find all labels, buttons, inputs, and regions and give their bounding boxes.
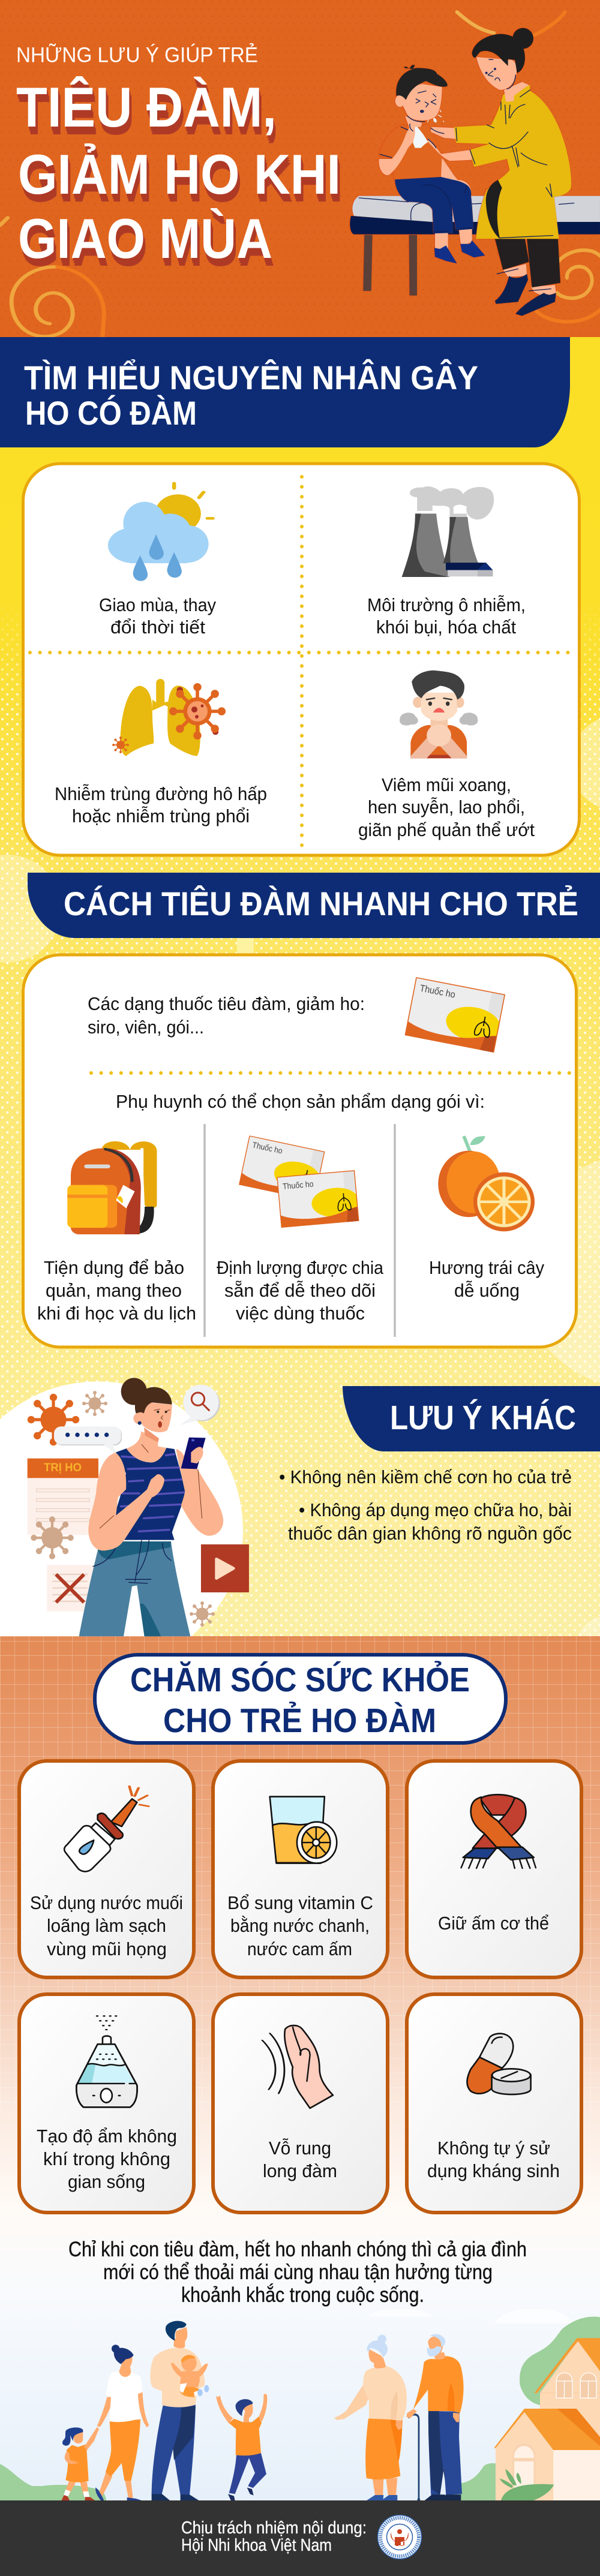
document: cough remedy: TRỊ HO [44, 1462, 82, 1474]
care card: chest percussion [213, 1994, 388, 2213]
benefit: pre-measured doses: việc dùng thuốc [236, 1303, 365, 1324]
note bullets: thuốc dân gian không rõ nguồn gốc [288, 1523, 572, 1544]
heading band: other notes [343, 1386, 600, 1451]
title: TIÊU ĐÀM, [16, 76, 277, 139]
care card: humidifier [19, 1994, 194, 2213]
panel: other notes [0, 1378, 600, 1636]
benefit: fruit flavour [429, 1136, 544, 1301]
heading band: causes [0, 337, 570, 447]
benefit: fruit flavour: Hương trái cây [429, 1257, 544, 1278]
care card: humidifier: gian sống [68, 2171, 145, 2192]
house [450, 2338, 600, 2500]
benefit: pre-measured doses: Thuốc ho [251, 1140, 283, 1156]
cause: chronic lung conditions: giãn phế quản thể ướt [358, 819, 535, 840]
care card: vitamin C [213, 1761, 388, 1977]
care card: no self-medicating antibiotics [407, 1994, 581, 2213]
rejected remedy document [47, 1565, 94, 1612]
closing message [68, 2238, 527, 2307]
illustration: family and house [0, 2309, 600, 2501]
closing message: mới có thể thoải mái cùng nhau tận hưởng từng [103, 2261, 493, 2284]
icon: medicine sachet: Thuốc ho [419, 984, 456, 1000]
heading band: causes: HO CÓ ĐÀM [25, 394, 197, 432]
mother [95, 2344, 149, 2500]
benefit: pre-measured doses: sẵn để dễ theo dõi [224, 1280, 376, 1301]
heading band: other notes: LƯU Ý KHÁC [390, 1398, 576, 1437]
family: grandparents and house [334, 2309, 600, 2500]
care card: saline spray [19, 1761, 194, 1977]
medicine forms text: Các dạng thuốc tiêu đàm, giảm ho: [88, 993, 365, 1014]
child [440, 156, 471, 194]
footer [0, 2500, 600, 2576]
cause: pollution: Môi trường ô nhiễm, [367, 594, 526, 615]
cause: pollution [367, 486, 526, 638]
care card: humidifier: khí trong không [43, 2148, 170, 2169]
cause: respiratory infection: hoặc nhiễm trùng phổi [72, 805, 250, 826]
care card: saline spray: Sử dụng nước muối [30, 1892, 183, 1913]
title [16, 76, 341, 270]
care card: no self-medicating antibiotics: Không tự ý sử [437, 2138, 550, 2159]
note bullets [279, 1466, 572, 1544]
care card: saline spray: vùng mũi họng [47, 1938, 167, 1959]
speech bubble: search [180, 1385, 220, 1425]
heading pill: child care: CHĂM SÓC SỨC KHỎE [130, 1660, 470, 1699]
cause: chronic lung conditions: Viêm mũi xoang, [382, 774, 511, 795]
care card: humidifier: Tạo độ ẩm không [37, 2126, 177, 2147]
grandmother [334, 2335, 407, 2500]
speech bubble: dots [54, 1426, 122, 1454]
medicine forms text [88, 993, 365, 1038]
care card: saline spray: loãng làm sạch [47, 1915, 166, 1936]
cause: weather change [99, 483, 216, 638]
benefit: portable: quản, mang theo [46, 1280, 182, 1301]
care card: no self-medicating antibiotics: dụng kháng sinh [427, 2160, 560, 2181]
care card: keep warm [407, 1761, 581, 1977]
note bullets: • Không nên kiềm chế cơn ho của trẻ [279, 1466, 572, 1487]
care card: chest percussion: Vỗ rung [269, 2138, 331, 2159]
boy [216, 2394, 267, 2500]
note bullets: • Không áp dụng mẹo chữa ho, bài [299, 1499, 572, 1520]
care card: vitamin C: bằng nước chanh, [230, 1915, 370, 1936]
care card: chest percussion: long đàm [263, 2160, 337, 2181]
document: cough remedy [28, 1459, 98, 1535]
benefit: pre-measured doses: Định lượng được chia [217, 1257, 384, 1278]
subtitle: NHỮNG LƯU Ý GIÚP TRẺ [16, 43, 258, 67]
care card: keep warm: Giữ ấm cơ thể [438, 1913, 549, 1934]
panel: causes card [23, 464, 580, 855]
father and baby [150, 2321, 209, 2500]
benefit: portable [37, 1141, 196, 1324]
footer: Chịu trách nhiệm nội dung: [181, 2518, 367, 2538]
heading band: causes: TÌM HIỂU NGUYÊN NHÂN GÂY [24, 359, 478, 396]
title: GIAO MÙA [18, 207, 272, 270]
cause: respiratory infection [55, 679, 267, 826]
title: GIẢM HO KHI [18, 143, 341, 206]
sachet intro text: Phụ huynh có thể chọn sản phẩm dạng gói vì: [116, 1091, 485, 1112]
cause: weather change: Giao mùa, thay [99, 594, 216, 615]
footer: Hội Nhi khoa Việt Nam [181, 2536, 332, 2555]
girl [61, 2427, 99, 2500]
logo: Vietnam Pediatric Association [378, 2515, 421, 2559]
medicine forms text: siro, viên, gói... [88, 1017, 204, 1038]
grandfather with cane [406, 2334, 464, 2500]
illustration: mother caring for coughing child on bench [350, 12, 600, 321]
cause: weather change: đổi thời tiết [110, 617, 205, 638]
family: parents and children [42, 2321, 267, 2501]
heading pill: child care [95, 1655, 506, 1743]
icon: video play [201, 1544, 249, 1592]
tape connector [237, 938, 254, 955]
cause: chronic lung conditions: hen suyễn, lao phổi, [368, 796, 525, 817]
closing message: Chỉ khi con tiêu đàm, hết ho nhanh chóng thì cả gia đình [68, 2238, 527, 2261]
cause: pollution: khói bụi, hóa chất [376, 617, 516, 638]
benefit: portable: Tiện dụng để bảo [44, 1257, 184, 1278]
mother [428, 127, 472, 161]
benefit: pre-measured doses: Thuốc ho [282, 1179, 314, 1191]
icon: medicine sachet [405, 978, 513, 1054]
benefit: fruit flavour: dễ uống [454, 1280, 520, 1301]
heading pill: child care: CHO TRẺ HO ĐÀM [163, 1701, 436, 1740]
illustration: woman searching remedies on phone [0, 1378, 249, 1636]
care card: vitamin C: nước cam ấm [247, 1938, 352, 1959]
cause: chronic lung conditions [358, 671, 535, 840]
heading band: quick relief [28, 873, 600, 938]
closing message: khoảnh khắc trong cuộc sống. [181, 2283, 424, 2307]
cause: respiratory infection: Nhiễm trùng đường hô hấp [55, 783, 267, 804]
benefit: pre-measured doses [217, 1136, 384, 1324]
panel: header hero [0, 0, 600, 337]
benefit: portable: khi đi học và du lịch [37, 1303, 196, 1324]
panel: relief card [23, 955, 576, 1347]
care card: vitamin C: Bổ sung vitamin C [227, 1892, 373, 1913]
